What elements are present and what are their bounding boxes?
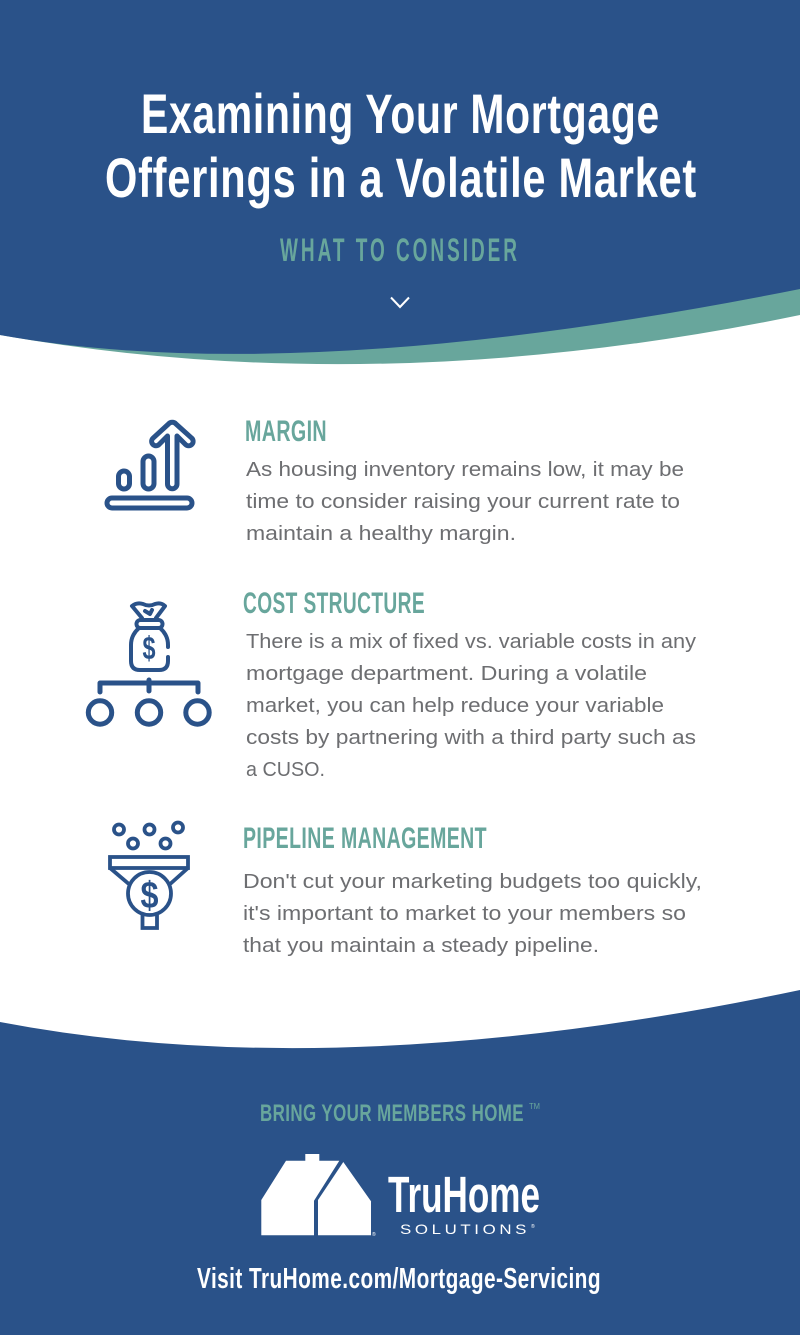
call to action: Visit TruHome.com/Mortgage-Servicing <box>197 1263 601 1295</box>
text: margin body <box>246 458 684 545</box>
icon: house <box>261 1154 371 1235</box>
registered marks: ® <box>531 1223 535 1230</box>
heading: margin: MARGIN <box>245 415 327 448</box>
text: pipeline body: that you maintain a steady pipeline. <box>243 934 599 957</box>
text: pipeline body: Don't cut your marketing budgets too quickly, <box>243 870 702 893</box>
text: margin body: time to consider raising your current rate to <box>246 490 680 513</box>
icon: money bag hierarchy: $ <box>142 630 156 666</box>
text: cost structure body: a CUSO. <box>246 758 325 781</box>
text: margin body: As housing inventory remains low, it may be <box>246 458 684 481</box>
icon: chevron down <box>391 298 409 307</box>
text: pipeline body <box>243 870 702 957</box>
text: cost structure body: costs by partnering with a third party such as <box>246 726 696 749</box>
text: cost structure body: market, you can help reduce your variable <box>246 694 664 717</box>
text: margin body: maintain a healthy margin. <box>246 522 516 545</box>
logo: TruHome Solutions <box>261 1154 540 1238</box>
tagline: BRING YOUR MEMBERS HOME <box>260 1100 524 1127</box>
heading: pipeline management: PIPELINE MANAGEMENT <box>243 822 487 855</box>
footer band <box>0 990 800 1335</box>
panel: pipeline management <box>110 822 702 957</box>
text: cost structure body: There is a mix of fixed vs. variable costs in any <box>246 630 697 653</box>
registered marks <box>372 1223 535 1238</box>
panel: margin <box>107 415 684 545</box>
registered marks: ® <box>372 1231 376 1238</box>
tagline: TM <box>529 1102 540 1111</box>
panel: cost structure <box>88 587 697 781</box>
heading: cost structure: COST STRUCTURE <box>243 587 425 620</box>
text: cost structure body: mortgage department. During a volatile <box>246 662 647 685</box>
icon: funnel with coins: $ <box>140 875 158 917</box>
wordmark: TruHome <box>388 1166 540 1223</box>
wordmark subline: SOLUTIONS <box>400 1221 530 1237</box>
header band <box>0 0 800 364</box>
icon: rising bar chart <box>107 422 193 508</box>
subtitle: WHAT TO CONSIDER <box>280 232 520 268</box>
icon: funnel with coins <box>110 822 188 928</box>
text: pipeline body: it's important to market to your members so <box>243 902 686 925</box>
text: cost structure body <box>246 630 697 781</box>
title <box>105 82 697 209</box>
icon: money bag hierarchy <box>88 603 209 724</box>
